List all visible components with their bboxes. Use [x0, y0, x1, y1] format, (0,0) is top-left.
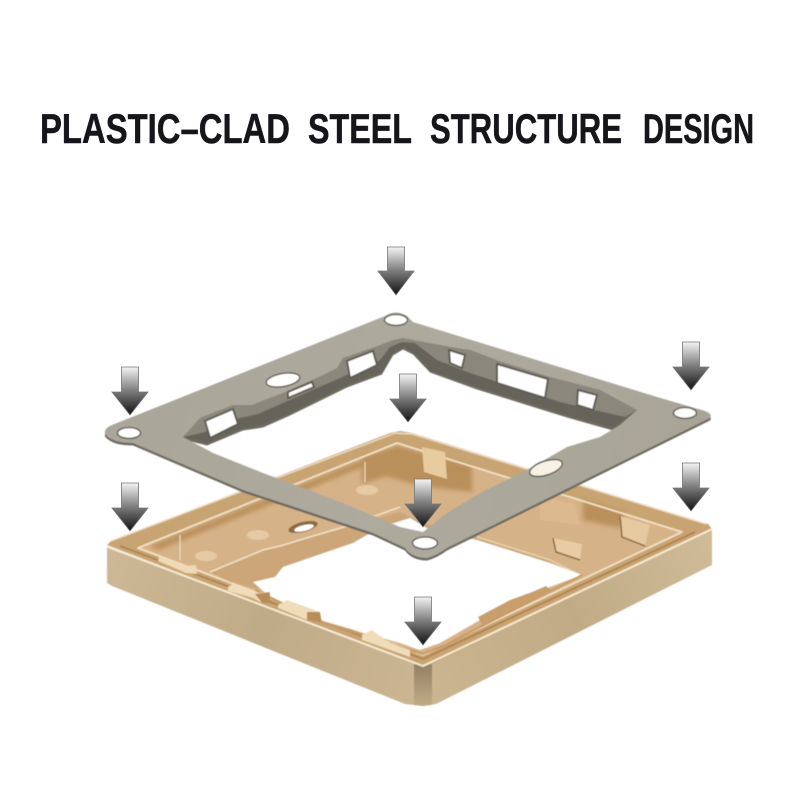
gold frame: front corner	[414, 662, 432, 706]
title: STRUCTURE	[430, 105, 622, 152]
gold frame: stepped inner ledge	[210, 512, 580, 650]
steel frame: oval slots	[265, 371, 564, 480]
gold frame: clip tabs front left	[158, 557, 410, 657]
gold frame: clip tabs far side	[422, 447, 650, 560]
steel frame: rectangular windows	[205, 350, 597, 438]
gold frame: mounting slot	[287, 519, 319, 535]
steel frame: embossed inner wall, lit upper part	[183, 338, 637, 437]
arrow: left of gold frame	[112, 483, 148, 531]
steel frame: flat top surface	[105, 312, 711, 558]
gold frame: small tab on right edge	[478, 586, 552, 625]
gold plastic frame	[107, 431, 712, 706]
steel frame: edge thickness	[105, 315, 711, 560]
steel frame	[105, 312, 711, 560]
steel frame: corner mounting holes	[118, 314, 696, 549]
gold frame: rear wall shading	[150, 446, 625, 550]
gold frame: thin ribs	[180, 462, 365, 560]
title	[40, 105, 754, 152]
arrow: right of gold frame	[673, 463, 709, 511]
gold frame: inner floor	[138, 443, 682, 655]
gold frame: bright rim highlights	[108, 433, 712, 666]
title: PLASTIC–CLAD	[40, 105, 290, 152]
arrow: right of steel frame	[673, 342, 709, 390]
title: STEEL	[308, 105, 412, 152]
arrow: top of steel frame	[378, 247, 414, 295]
gold frame: front lip	[255, 575, 582, 654]
gold frame: outer right side face	[423, 530, 712, 706]
gold frame: central opening	[253, 518, 582, 650]
gold frame: top rim	[107, 431, 712, 666]
title: DESIGN	[643, 105, 754, 152]
gold frame: outer left side face	[107, 547, 423, 706]
arrow: bottom of steel frame	[405, 479, 441, 527]
arrow: left of steel frame	[112, 367, 148, 415]
gold frame: raised column	[540, 497, 580, 525]
arrow: bottom of gold frame	[405, 597, 441, 645]
gold frame: circular moulding marks	[195, 485, 378, 561]
steel frame: embossed inner wall, dark lower part	[183, 338, 637, 443]
arrow: inner steel frame	[390, 374, 426, 422]
